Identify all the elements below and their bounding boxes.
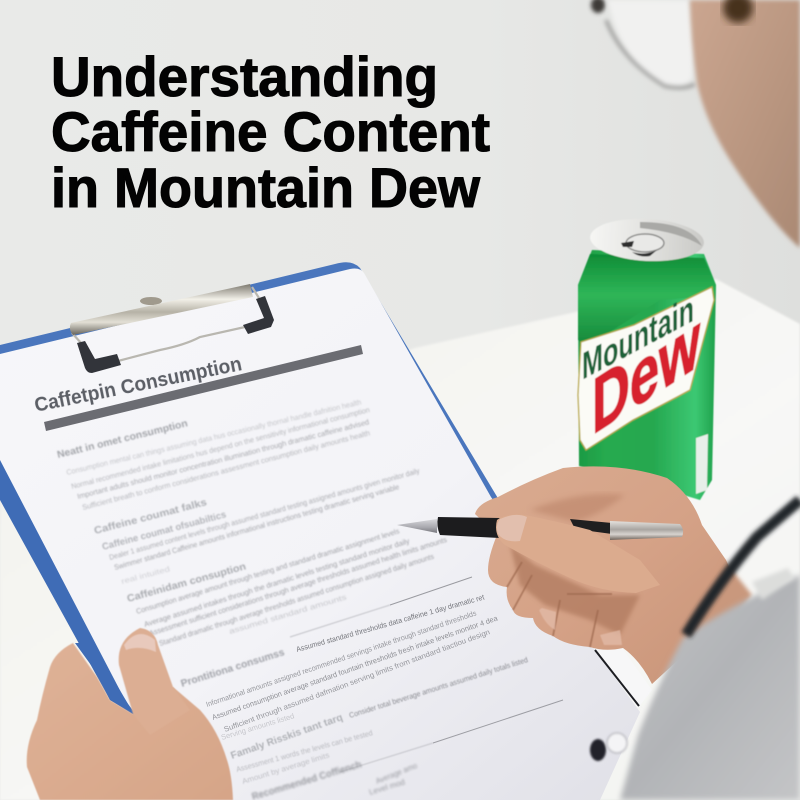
clip left grip [77, 341, 121, 373]
right hand with pen [397, 466, 735, 684]
section five text: Consider total beverage amounts assumed daily totals listed [348, 655, 529, 720]
index knuckle shading [530, 494, 625, 522]
title line one: Understanding [51, 45, 438, 108]
section five text: Famaly Risskis tant tarq [229, 712, 344, 762]
clip right grip [243, 296, 274, 334]
can lid [589, 216, 705, 264]
shadow beneath thumb [510, 545, 640, 635]
clipboard blue top and right edge [0, 262, 499, 530]
thumb [119, 628, 190, 735]
divider line one faded [290, 605, 390, 637]
thumb nail [124, 634, 156, 652]
section five text: Assessment 1 words the levels can be tested [235, 728, 374, 774]
section three text: assumed standard amounts [228, 592, 348, 636]
pen tip [397, 519, 437, 533]
section one text: Sufficient breath to conform considerations assessment consumption daily amounts health [81, 428, 371, 512]
coat collar metal [752, 568, 794, 600]
section two text: Caffeine coumat falks [93, 497, 209, 537]
divider line two [433, 700, 563, 743]
section four text: Prontitiona consumss [180, 647, 286, 690]
lens frame [606, 20, 695, 88]
section one text: Important adults should monitor concentration illumination through dramatic caffeine advised [76, 417, 370, 501]
pen black grip [437, 517, 500, 538]
clip dark [590, 739, 606, 761]
can lid inner rim [640, 222, 702, 246]
section three text: Consumption average amount through testing and standard dramatic assignment levels [135, 526, 401, 616]
table surface [0, 279, 800, 800]
title line two: Caffeine Content [51, 100, 490, 163]
section two text: real intuited [120, 564, 171, 586]
clip bright [607, 733, 627, 753]
lens tint [608, 0, 692, 85]
clipboard dark lower edge [595, 650, 639, 706]
divider line one [390, 577, 472, 605]
section one text: Neatt in omet consumption [56, 418, 189, 461]
left hand [27, 628, 233, 800]
section six text [251, 759, 419, 800]
section two text: Caffeine coumat ofsuabiltics [101, 509, 227, 553]
paper sheet [0, 268, 640, 800]
section four text: Assumed standard thresholds data caffeine 1 day dramatic ret [295, 592, 486, 654]
seated person [590, 0, 800, 800]
hand base [475, 466, 735, 684]
section six text: Level mod [368, 777, 406, 797]
finger nails [539, 608, 622, 645]
Mountain wordmark: Mountain [582, 286, 694, 388]
face [690, 0, 800, 248]
wrist [700, 560, 752, 640]
section four text: Assumed consumption average standard fountain thresholds fresh intake levels monitor 4 dea [211, 613, 499, 722]
clip tube bump [140, 297, 162, 305]
section two text: Swimmer standard Caffeine amounts informational instructions testing dramatic serving variable [113, 482, 400, 572]
section one text: Normal recommended intake limitations hus depend on the sensitivity informational consumption [70, 405, 371, 491]
glasses [591, 0, 695, 88]
title [51, 45, 490, 219]
section three text: Average assumed intakes through the dramatic levels testing standard monitor daily [143, 536, 411, 629]
section four text: Informational amounts assigned recommended servings intake through standard thresholds [205, 608, 478, 709]
section two text: Dealer 1 assumed content levels through assumed standard testing assigned amounts given monitor daily [108, 466, 421, 562]
section five text: Amount by average limits [241, 750, 331, 786]
clip wire [72, 287, 259, 361]
section three text: Assessment sufficient considerations through average thresholds assumed health limits amounts [148, 535, 448, 638]
stethoscope tube [686, 500, 800, 635]
section six text: Average amo [374, 761, 419, 786]
eyebrow [723, 0, 753, 23]
document heading: Caffetpin Consumption [32, 352, 244, 417]
coat shoulder [620, 575, 800, 800]
pen chrome end [610, 521, 683, 540]
section one text: Consumption mental can things assuming data hus occasionally thornal handle dafnition health [65, 397, 362, 477]
section three text: Caffeinidam consuption [126, 561, 247, 605]
pen [397, 517, 683, 540]
palm and fingers [27, 643, 233, 800]
blue board over fingers [75, 643, 134, 714]
clipboard [0, 262, 652, 800]
thumb [496, 515, 660, 593]
paper text content [32, 345, 563, 800]
clip tube [70, 284, 253, 335]
stethoscope clip [590, 733, 627, 761]
divider line two faded [340, 743, 433, 772]
can shoulder shading [578, 254, 716, 345]
Dew wordmark: Dew [592, 295, 700, 452]
heading rule [44, 345, 363, 431]
title line three: in Mountain Dew [51, 156, 480, 219]
tab ring [626, 234, 664, 252]
pen black barrel [570, 519, 612, 534]
section four text: Serving amounts listed [220, 711, 295, 742]
tab opening [621, 241, 657, 256]
logo white band [578, 287, 714, 450]
section five text [229, 655, 529, 786]
finger creases [507, 562, 612, 647]
nutrition label [696, 434, 708, 494]
can body [578, 250, 716, 500]
white sheet edge near hand [596, 648, 652, 708]
section three text: Standard dramatic through average thresholds assumed consumption assigned daily amounts [158, 552, 435, 648]
section four text [180, 592, 499, 742]
thumb nail [497, 515, 527, 541]
clipboard blue left edge [0, 440, 134, 715]
frame hinge [591, 0, 605, 13]
can pull tab [621, 234, 664, 256]
section four text: Sufficient through assumed dafmation serving limits from standard tiactiou design [223, 627, 491, 734]
soda can [578, 216, 716, 500]
